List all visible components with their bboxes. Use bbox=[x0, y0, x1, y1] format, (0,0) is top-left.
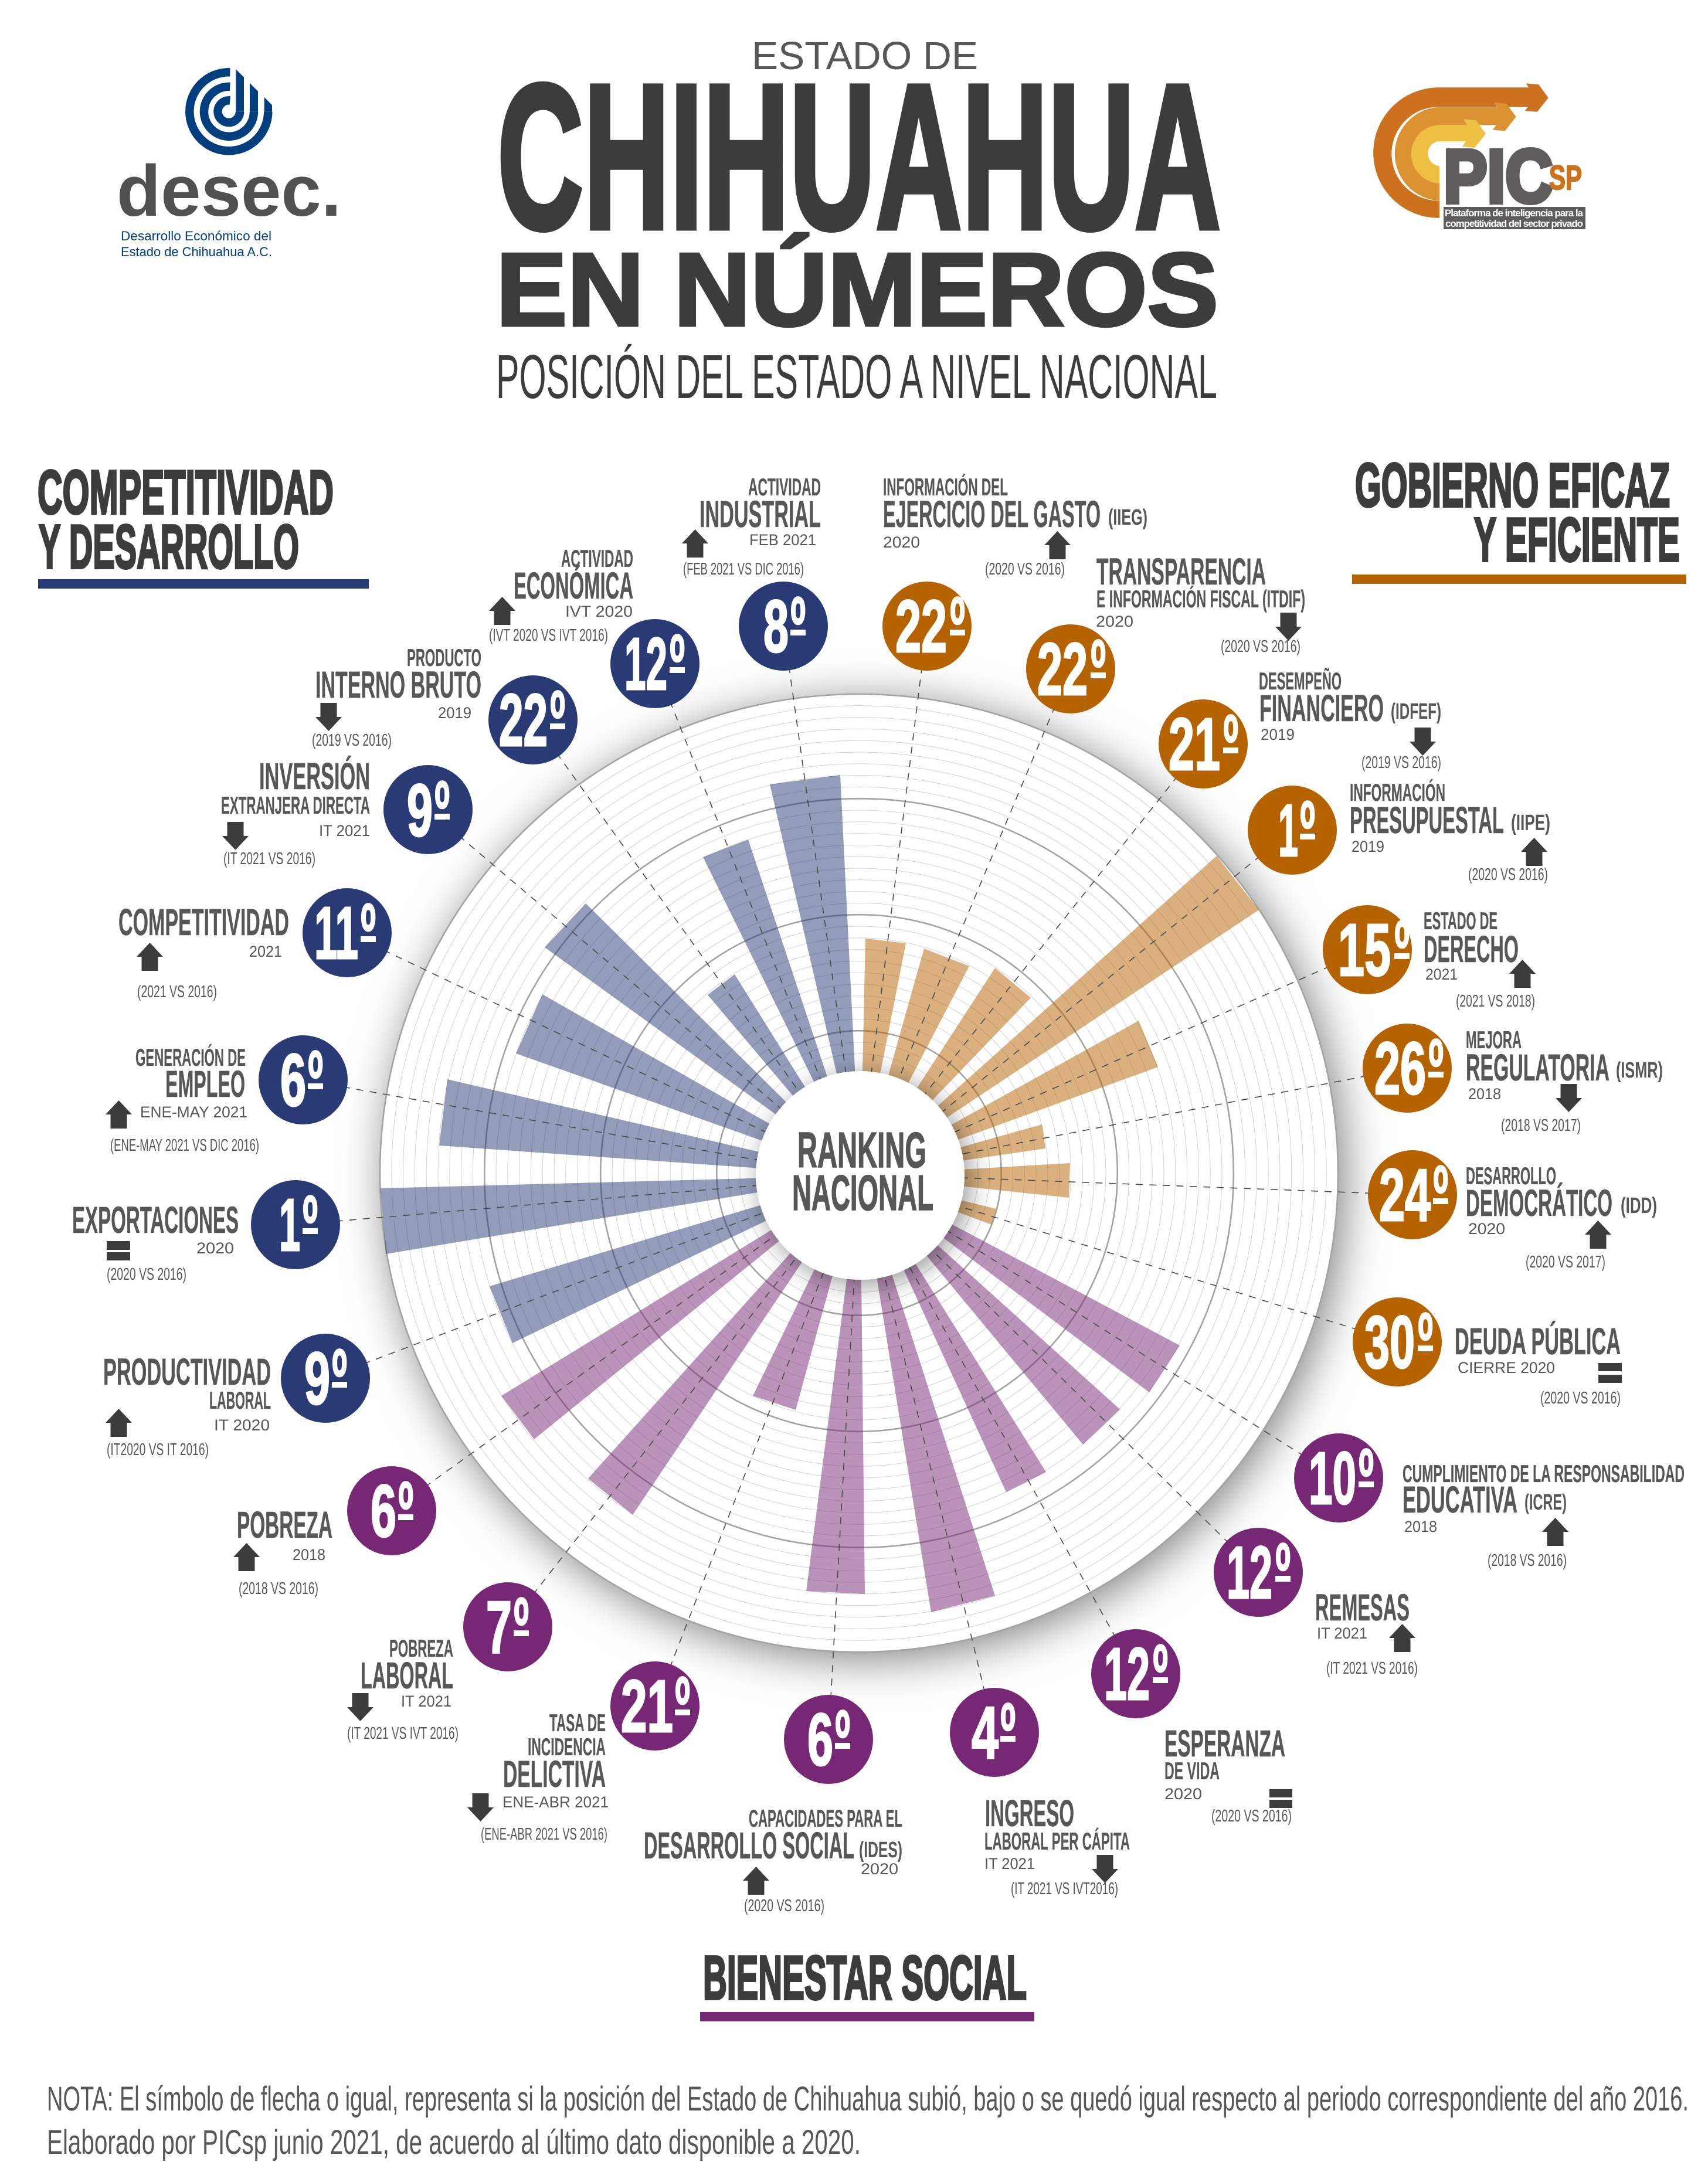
indicator: mejora regulatoria bbox=[1363, 1022, 1663, 1135]
label bbox=[110, 1043, 259, 1155]
rank badge: º bbox=[1418, 1296, 1433, 1386]
arrow down bbox=[222, 822, 249, 850]
label: EMPLEO bbox=[165, 1063, 245, 1105]
rank badge bbox=[281, 1333, 370, 1423]
label: DERECHO bbox=[1424, 928, 1519, 970]
rank badge: º bbox=[1275, 1527, 1291, 1617]
label: PRESUPUESTAL bbox=[1350, 799, 1504, 841]
rank badge: º bbox=[1091, 623, 1106, 713]
indicator: estado de derecho bbox=[1323, 904, 1536, 1011]
logo subtitle: Desarrollo Económico del bbox=[121, 229, 271, 243]
label: ACTIVIDAD bbox=[748, 473, 821, 501]
rank badge: 21 bbox=[1169, 703, 1220, 786]
bars: bienestar social bbox=[501, 1175, 1180, 1612]
label bbox=[237, 1504, 332, 1598]
rank badge: 1 bbox=[1278, 789, 1298, 872]
rank badge: 21 bbox=[621, 1665, 673, 1748]
label: DE VIDA bbox=[1164, 1757, 1220, 1785]
label: (IT 2021 VS IVT2016) bbox=[1011, 1879, 1118, 1898]
arrow down bbox=[347, 1693, 373, 1721]
label: (2019 VS 2016) bbox=[1361, 753, 1441, 772]
arrow up bbox=[137, 943, 163, 971]
rank badge: 6 bbox=[280, 1039, 306, 1121]
rank badge: º bbox=[1359, 1432, 1374, 1522]
title: ESTADO DE bbox=[752, 34, 978, 78]
label: INFORMACIÓN DEL bbox=[883, 473, 1008, 501]
rank badge: 12 bbox=[624, 623, 667, 705]
label: (IT 2021 VS IVT 2016) bbox=[347, 1724, 459, 1743]
logo tagline bbox=[1444, 207, 1585, 229]
label: MEJORA bbox=[1466, 1026, 1522, 1053]
label bbox=[347, 1634, 459, 1743]
arrow up bbox=[106, 1409, 132, 1437]
rank badge: 6 bbox=[807, 1698, 833, 1781]
label: (2018 VS 2017) bbox=[1501, 1116, 1581, 1135]
rank badge bbox=[1323, 904, 1412, 994]
arrow up bbox=[682, 529, 708, 558]
arrow down bbox=[1556, 1084, 1582, 1112]
rank badge: º bbox=[835, 1694, 850, 1784]
bars: competitividad y desarrollo bbox=[381, 775, 860, 1343]
label bbox=[221, 755, 370, 868]
label bbox=[489, 545, 633, 645]
label: (IT 2021 VS 2016) bbox=[1326, 1659, 1418, 1678]
rank badge: 4 bbox=[972, 1691, 999, 1774]
label: POBREZA bbox=[237, 1504, 332, 1546]
rank badge: 22 bbox=[1037, 628, 1088, 711]
label: 2020 bbox=[1468, 1220, 1505, 1238]
label: EXTRANJERA DIRECTA bbox=[221, 791, 370, 819]
rank badge: º bbox=[1000, 1687, 1016, 1777]
heading: bienestar social: BIENESTAR SOCIAL bbox=[703, 1943, 1027, 2013]
label: 2018 bbox=[1468, 1085, 1501, 1103]
indicator: esperanza de vida bbox=[1091, 1628, 1292, 1826]
indicator: producto interno bruto bbox=[312, 644, 578, 764]
arrow up bbox=[1389, 1624, 1415, 1652]
rank badge: 15 bbox=[1338, 909, 1391, 991]
rank badge: 10 bbox=[1309, 1437, 1356, 1520]
label: 2019 bbox=[438, 704, 471, 722]
rank badge: º bbox=[1433, 1149, 1448, 1239]
equal sign bbox=[1598, 1363, 1622, 1383]
indicator: deuda publica bbox=[1353, 1296, 1622, 1408]
rank badge: 12 bbox=[1104, 1633, 1150, 1715]
label: DESARROLLO SOCIAL bbox=[644, 1824, 854, 1867]
label: ENE-ABR 2021 bbox=[502, 1793, 609, 1811]
wordmark: desec. bbox=[117, 151, 341, 232]
label: (IIPE) bbox=[1511, 811, 1550, 835]
label: (2020 VS 2016) bbox=[744, 1896, 824, 1915]
label: (2020 VS 2017) bbox=[1526, 1253, 1605, 1272]
rank badge: º bbox=[950, 580, 965, 671]
label: 2021 bbox=[1425, 966, 1458, 983]
arrow down bbox=[1410, 728, 1436, 756]
label bbox=[1424, 907, 1535, 1011]
rank badge: 6 bbox=[371, 1470, 396, 1552]
label bbox=[683, 473, 821, 579]
equal sign bbox=[1269, 1789, 1292, 1808]
label: INGRESO bbox=[985, 1792, 1074, 1834]
label: 2018 bbox=[293, 1546, 325, 1564]
label: LABORAL bbox=[361, 1654, 453, 1697]
rank badge bbox=[251, 1179, 340, 1269]
label: 2021 bbox=[249, 943, 282, 960]
label: INVERSIÓN bbox=[259, 755, 370, 797]
rank badge: º bbox=[303, 1179, 318, 1269]
label: (2020 VS 2016) bbox=[1540, 1389, 1621, 1408]
arrow up bbox=[1521, 838, 1547, 866]
label: (2020 VS 2016) bbox=[985, 560, 1065, 579]
rank badge: º bbox=[332, 1333, 347, 1423]
rank badge: º bbox=[1428, 1022, 1444, 1113]
label: (IDES) bbox=[859, 1838, 902, 1862]
label: DESARROLLO bbox=[1466, 1162, 1556, 1189]
label: 2019 bbox=[1352, 838, 1384, 855]
indicator: exportaciones bbox=[72, 1179, 340, 1284]
bars: gobierno eficaz bbox=[860, 856, 1259, 1225]
logo subtitle: Estado de Chihuahua A.C. bbox=[121, 244, 272, 259]
label: (IDFEF) bbox=[1391, 699, 1441, 724]
center hub: ranking nacional: NACIONAL bbox=[792, 1165, 933, 1221]
label: GENERACIÓN DE bbox=[135, 1043, 246, 1071]
label: 2020 bbox=[883, 533, 920, 551]
chart: radial ranking bbox=[296, 626, 1412, 1739]
label bbox=[644, 1804, 902, 1915]
indicator: cumplimiento educativa bbox=[1294, 1432, 1685, 1570]
title: EN NÚMEROS bbox=[496, 232, 1218, 348]
label bbox=[1455, 1320, 1621, 1408]
rank badge: º bbox=[308, 1034, 323, 1124]
rank badge: 30 bbox=[1364, 1301, 1415, 1384]
heading: gobierno eficaz y eficiente bbox=[1352, 451, 1686, 584]
rank badge bbox=[950, 1687, 1039, 1777]
indicator: capacidades para el desarrollo social bbox=[644, 1694, 902, 1915]
rank badge: º bbox=[1223, 698, 1238, 788]
label: LABORAL PER CÁPITA bbox=[984, 1827, 1130, 1855]
label: (ISMR) bbox=[1616, 1058, 1663, 1083]
logo subtitle bbox=[121, 229, 272, 259]
label: ECONÓMICA bbox=[514, 565, 633, 607]
indicator: productividad laboral bbox=[103, 1333, 370, 1459]
label: LABORAL bbox=[209, 1386, 271, 1414]
equal sign bbox=[107, 1241, 130, 1260]
arrow up bbox=[1542, 1518, 1568, 1546]
rank badge: º bbox=[670, 618, 685, 708]
arrow up bbox=[1585, 1221, 1611, 1249]
indicator: desempeno financiero bbox=[1159, 667, 1441, 788]
rank badge: º bbox=[434, 764, 450, 855]
label: POBREZA bbox=[389, 1634, 453, 1662]
label: (2019 VS 2016) bbox=[312, 731, 392, 750]
rank badge: º bbox=[1153, 1628, 1168, 1718]
indicator: remesas bbox=[1214, 1527, 1418, 1678]
indicator: ingreso laboral per capita bbox=[950, 1687, 1130, 1898]
chart disc bbox=[380, 694, 1338, 1652]
rank badge: º bbox=[1394, 904, 1410, 994]
indicator: pobreza bbox=[233, 1465, 436, 1598]
rank badge: º bbox=[675, 1660, 690, 1751]
label: E INFORMACIÓN FISCAL (ITDIF) bbox=[1096, 584, 1305, 613]
icon: desec spiral bbox=[189, 69, 272, 151]
label: 2020 bbox=[1164, 1785, 1202, 1803]
label: 2018 bbox=[1404, 1518, 1437, 1535]
rank badge: º bbox=[550, 674, 565, 764]
heading: competitividad y desarrollo: Y DESARROLLO bbox=[39, 512, 299, 582]
arrow down bbox=[1092, 1855, 1118, 1883]
label bbox=[1164, 1722, 1292, 1826]
label: (IT 2021 VS 2016) bbox=[223, 849, 315, 868]
label bbox=[1466, 1162, 1657, 1272]
label: REMESAS bbox=[1315, 1586, 1410, 1629]
label bbox=[312, 644, 481, 750]
label: EDUCATIVA bbox=[1403, 1479, 1517, 1521]
rank badge: º bbox=[790, 580, 806, 671]
label bbox=[984, 1792, 1130, 1898]
label: INFORMACIÓN bbox=[1350, 778, 1445, 806]
footnote bbox=[47, 2080, 1689, 2161]
label: IT 2021 bbox=[319, 822, 370, 840]
label: EXPORTACIONES bbox=[72, 1199, 239, 1241]
label: (ENE-MAY 2021 VS DIC 2016) bbox=[110, 1136, 259, 1155]
label: TASA DE bbox=[549, 1709, 606, 1736]
label bbox=[1096, 550, 1305, 656]
rank badge bbox=[463, 1581, 552, 1671]
label: INTERNO BRUTO bbox=[315, 664, 481, 706]
rings bbox=[380, 694, 1338, 1652]
label bbox=[103, 1351, 271, 1459]
label bbox=[72, 1199, 239, 1284]
rank badge: 9 bbox=[304, 1337, 330, 1420]
rank badge: 1 bbox=[279, 1184, 300, 1266]
label bbox=[1259, 667, 1441, 772]
heading: bienestar social bbox=[700, 1943, 1034, 2021]
indicator: desarrollo democratico bbox=[1368, 1149, 1657, 1272]
rank badge bbox=[383, 764, 473, 855]
arrow down bbox=[315, 703, 342, 731]
label: IT 2020 bbox=[214, 1416, 270, 1434]
rank badge bbox=[347, 1465, 436, 1555]
rank badge bbox=[739, 580, 828, 671]
rank badge: 7 bbox=[486, 1586, 512, 1668]
arrow down bbox=[1275, 613, 1302, 641]
rank badge bbox=[1248, 784, 1337, 875]
arrow up bbox=[106, 1100, 132, 1129]
rank badge: 9 bbox=[407, 769, 433, 852]
label: 2019 bbox=[1261, 726, 1295, 743]
heading: competitividad y desarrollo: COMPETITIVIDAD bbox=[38, 458, 334, 527]
logo tagline: Plataforma de inteligencia para la bbox=[1445, 208, 1584, 219]
center hub: ranking nacional bbox=[756, 1071, 965, 1280]
rank badge: 22 bbox=[895, 585, 947, 668]
arrow up bbox=[1044, 531, 1071, 559]
label: (FEB 2021 VS DIC 2016) bbox=[683, 560, 804, 579]
label: (2020 VS 2016) bbox=[1221, 637, 1300, 656]
indicator: tasa de incidencia delictiva bbox=[467, 1660, 700, 1844]
label: ESTADO DE bbox=[1424, 907, 1498, 934]
label bbox=[1403, 1460, 1685, 1570]
label: PRODUCTO bbox=[407, 644, 481, 671]
label: ESPERANZA bbox=[1164, 1722, 1285, 1765]
arrow up bbox=[489, 597, 515, 625]
label: DELICTIVA bbox=[503, 1753, 606, 1795]
label: (2020 VS 2016) bbox=[1468, 865, 1548, 884]
label: (2020 VS 2016) bbox=[1211, 1807, 1292, 1826]
indicator: ejercicio del gasto bbox=[882, 473, 1147, 671]
indicator: actividad economica bbox=[489, 545, 700, 708]
label bbox=[1466, 1026, 1663, 1135]
label: (2018 VS 2016) bbox=[1488, 1551, 1567, 1570]
rank badge: 11 bbox=[314, 892, 358, 974]
label: COMPETITIVIDAD bbox=[118, 901, 289, 943]
label bbox=[118, 901, 289, 1001]
label: CIERRE 2020 bbox=[1458, 1359, 1555, 1377]
indicator: pobreza laboral bbox=[347, 1581, 552, 1743]
rank badge: º bbox=[514, 1581, 529, 1671]
indicator: informacion presupuestal bbox=[1248, 778, 1550, 884]
center hub: ranking nacional: RANKING bbox=[797, 1123, 926, 1178]
logo tagline: competitividad del sector privado bbox=[1445, 218, 1583, 229]
icon: nested arrows bbox=[1373, 83, 1549, 218]
label: (ICRE) bbox=[1524, 1490, 1567, 1515]
indicator: generacion de empleo bbox=[106, 1034, 348, 1155]
label: ACTIVIDAD bbox=[561, 545, 633, 572]
label bbox=[883, 473, 1147, 579]
indicator: competitividad bbox=[118, 887, 392, 1001]
dashed leader lines bbox=[296, 626, 1412, 1739]
label: IT 2021 bbox=[984, 1855, 1035, 1872]
rank badge: 24 bbox=[1379, 1154, 1431, 1236]
label: 2020 bbox=[196, 1239, 234, 1257]
label: FINANCIERO bbox=[1259, 687, 1384, 729]
footnote: Elaborado por PICsp junio 2021, de acuerdo al último dato disponible a 2020. bbox=[47, 2123, 861, 2161]
label: FEB 2021 bbox=[749, 531, 816, 549]
rank badge: º bbox=[361, 887, 376, 977]
label: PRODUCTIVIDAD bbox=[103, 1351, 271, 1393]
label: (2020 VS 2016) bbox=[107, 1265, 186, 1284]
label: INDUSTRIAL bbox=[700, 493, 821, 535]
label: 2020 bbox=[861, 1860, 898, 1878]
rank badge bbox=[784, 1694, 873, 1784]
rank badge: º bbox=[398, 1465, 413, 1555]
rank badge: 8 bbox=[763, 585, 789, 668]
indicator: transparencia bbox=[1026, 550, 1305, 713]
label: TRANSPARENCIA bbox=[1096, 550, 1266, 593]
label: IT 2021 bbox=[401, 1692, 451, 1710]
label: IVT 2020 bbox=[565, 603, 633, 620]
label: (2021 VS 2018) bbox=[1456, 992, 1535, 1011]
heading: competitividad y desarrollo bbox=[38, 458, 369, 589]
label: (IVT 2020 VS IVT 2016) bbox=[489, 626, 608, 645]
arrow up bbox=[1509, 960, 1536, 988]
rank badge: 22 bbox=[499, 679, 548, 762]
label: ENE-MAY 2021 bbox=[140, 1103, 247, 1121]
logo: PICsp bbox=[1373, 83, 1585, 229]
rank badge bbox=[259, 1034, 348, 1124]
label: (IT2020 VS IT 2016) bbox=[107, 1440, 209, 1459]
wordmark PIC: PIC bbox=[1444, 135, 1553, 219]
label: (ENE-ABR 2021 VS 2016) bbox=[481, 1825, 607, 1844]
logo: desec bbox=[117, 69, 341, 259]
label: CAPACIDADES PARA EL bbox=[749, 1804, 902, 1832]
label: 2020 bbox=[1096, 613, 1133, 630]
label bbox=[481, 1709, 609, 1844]
rank badge: 12 bbox=[1227, 1531, 1272, 1614]
label: IT 2021 bbox=[1317, 1624, 1367, 1642]
label bbox=[1350, 778, 1550, 884]
label: (2018 VS 2016) bbox=[239, 1579, 318, 1598]
arrow down bbox=[467, 1793, 494, 1821]
arrow up bbox=[743, 1867, 769, 1895]
indicator: actividad industrial bbox=[682, 473, 828, 671]
label: DESEMPEÑO bbox=[1259, 667, 1342, 695]
label: EJERCICIO DEL GASTO bbox=[883, 493, 1101, 535]
title bbox=[496, 34, 1221, 412]
indicator: inversion extranjera directa bbox=[221, 755, 473, 868]
rank badge: 26 bbox=[1374, 1027, 1426, 1110]
wordmark SP: SP bbox=[1549, 159, 1582, 197]
arrow up bbox=[233, 1543, 260, 1571]
rank badge: º bbox=[1300, 784, 1315, 875]
label: (IDD) bbox=[1621, 1194, 1657, 1218]
label: (2021 VS 2016) bbox=[137, 983, 217, 1001]
label bbox=[1315, 1586, 1418, 1678]
label: INCIDENCIA bbox=[528, 1733, 606, 1760]
label: (IIEG) bbox=[1108, 505, 1147, 530]
